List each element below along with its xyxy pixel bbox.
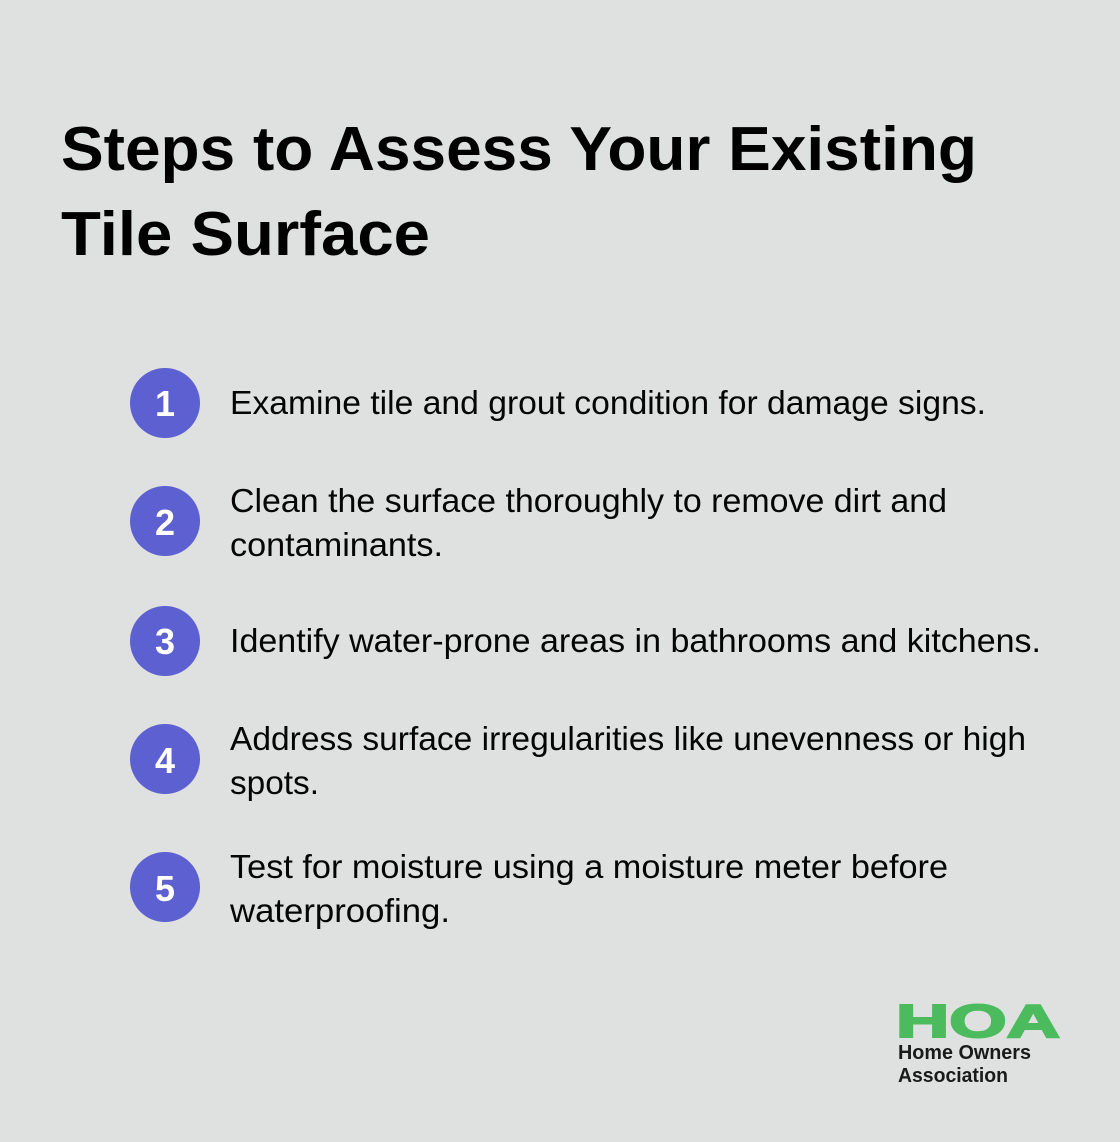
step 2 text [230, 482, 947, 563]
step 5 text [229, 848, 948, 929]
number badge 1 [130, 368, 200, 438]
logo: Home Owners Association: Association [898, 1065, 1008, 1087]
step 4 text: Address surface irregularities like unevenness or high [230, 720, 1026, 757]
title [61, 115, 977, 269]
number badge 4: 4 [155, 740, 175, 781]
title: Steps to Assess Your Existing [61, 115, 977, 184]
step 5 text: Test for moisture using a moisture meter before [230, 848, 948, 885]
step 4 [130, 720, 1026, 801]
number badge 1: 1 [155, 383, 175, 424]
number badge 5: 5 [155, 868, 175, 909]
number badge 3 [130, 606, 200, 676]
step 3 text: Identify water-prone areas in bathrooms and kitchens. [230, 622, 1041, 659]
step 4 text: spots. [230, 764, 319, 801]
step 3 [130, 606, 1041, 676]
number badge 2 [130, 486, 200, 556]
logo: Home Owners Association [896, 995, 1060, 1087]
step 2 text: contaminants. [230, 526, 443, 563]
number badge 4 [130, 724, 200, 794]
title: Tile Surface [61, 200, 430, 269]
step 1 text: Examine tile and grout condition for damage signs. [230, 384, 986, 421]
step 5 [130, 848, 948, 929]
step 2 [130, 482, 947, 563]
step 1 [130, 368, 986, 438]
step 2 text: Clean the surface thoroughly to remove dirt and [230, 482, 947, 519]
number badge 3: 3 [155, 621, 175, 662]
logo: Home Owners Association: Home Owners [898, 1042, 1031, 1064]
number badge 5 [130, 852, 200, 922]
logo: Home Owners Association: HOA [896, 995, 1060, 1047]
number badge 2: 2 [155, 502, 175, 543]
step 4 text [230, 720, 1026, 801]
step 5 text: waterproofing. [229, 892, 450, 929]
